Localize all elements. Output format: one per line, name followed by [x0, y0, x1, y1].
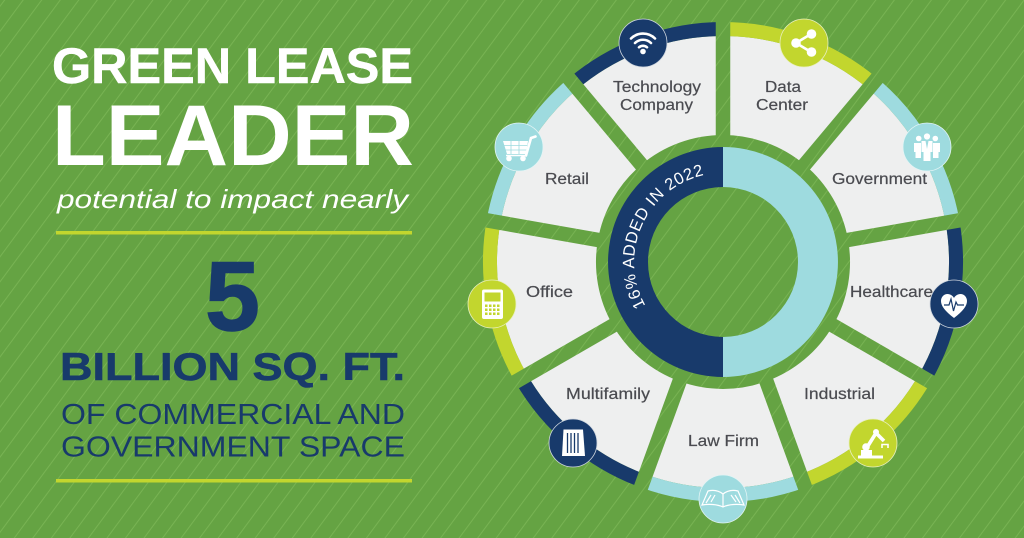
icon: robot arm [849, 419, 897, 467]
title: Leader: LEADER [52, 88, 414, 184]
label: Government: Government [832, 171, 928, 188]
label: Technology Company: Company [620, 97, 693, 114]
icon: wifi [619, 19, 667, 67]
label: Retail: Retail [545, 171, 589, 188]
label: Healthcare: Healthcare [850, 284, 933, 301]
label: Office: Office [526, 284, 573, 301]
stat unit: BILLION SQ. FT. [60, 346, 405, 389]
label: Technology Company: Technology [613, 79, 701, 96]
icon: building [549, 419, 597, 467]
segment: healthcare [836, 228, 964, 376]
big number: 5 [205, 241, 260, 351]
label: Law Firm: Law Firm [688, 433, 759, 450]
icon: share [780, 19, 828, 67]
donut chart: 16% added in 2022 [608, 147, 838, 377]
icon: open book [699, 475, 747, 523]
segment: office [482, 228, 610, 376]
stat description line 1: OF COMMERCIAL AND [61, 399, 405, 431]
sector wheel [483, 22, 963, 502]
label: Technology Company [613, 79, 701, 114]
stat description line 2: GOVERNMENT SPACE [61, 432, 405, 464]
icon: calculator [468, 280, 516, 328]
subtitle: potential to impact nearly [56, 184, 410, 214]
segment: law firm [648, 384, 798, 501]
segment: multifamily [519, 332, 673, 485]
segment: technology company [574, 22, 716, 160]
segment: data center [730, 22, 872, 160]
icon: shopping cart [495, 123, 543, 171]
divider: bottom [56, 479, 412, 482]
segment: government [810, 83, 958, 233]
icon: people [903, 123, 951, 171]
title: Green Lease: GREEN LEASE [52, 38, 413, 94]
label: Multifamily: Multifamily [566, 386, 650, 403]
segment labels [526, 79, 933, 450]
divider: top [56, 231, 412, 234]
segment: industrial [773, 332, 927, 485]
label: Industrial: Industrial [804, 386, 875, 403]
label: Data Center: Data [765, 79, 801, 96]
label: Data Center: Center [756, 97, 808, 114]
icon: heart [930, 280, 978, 328]
donut chart: 16% added in 2022: 16% ADDED IN 2022 [622, 164, 704, 308]
segment: retail [488, 83, 636, 233]
label: Data Center [756, 79, 808, 114]
